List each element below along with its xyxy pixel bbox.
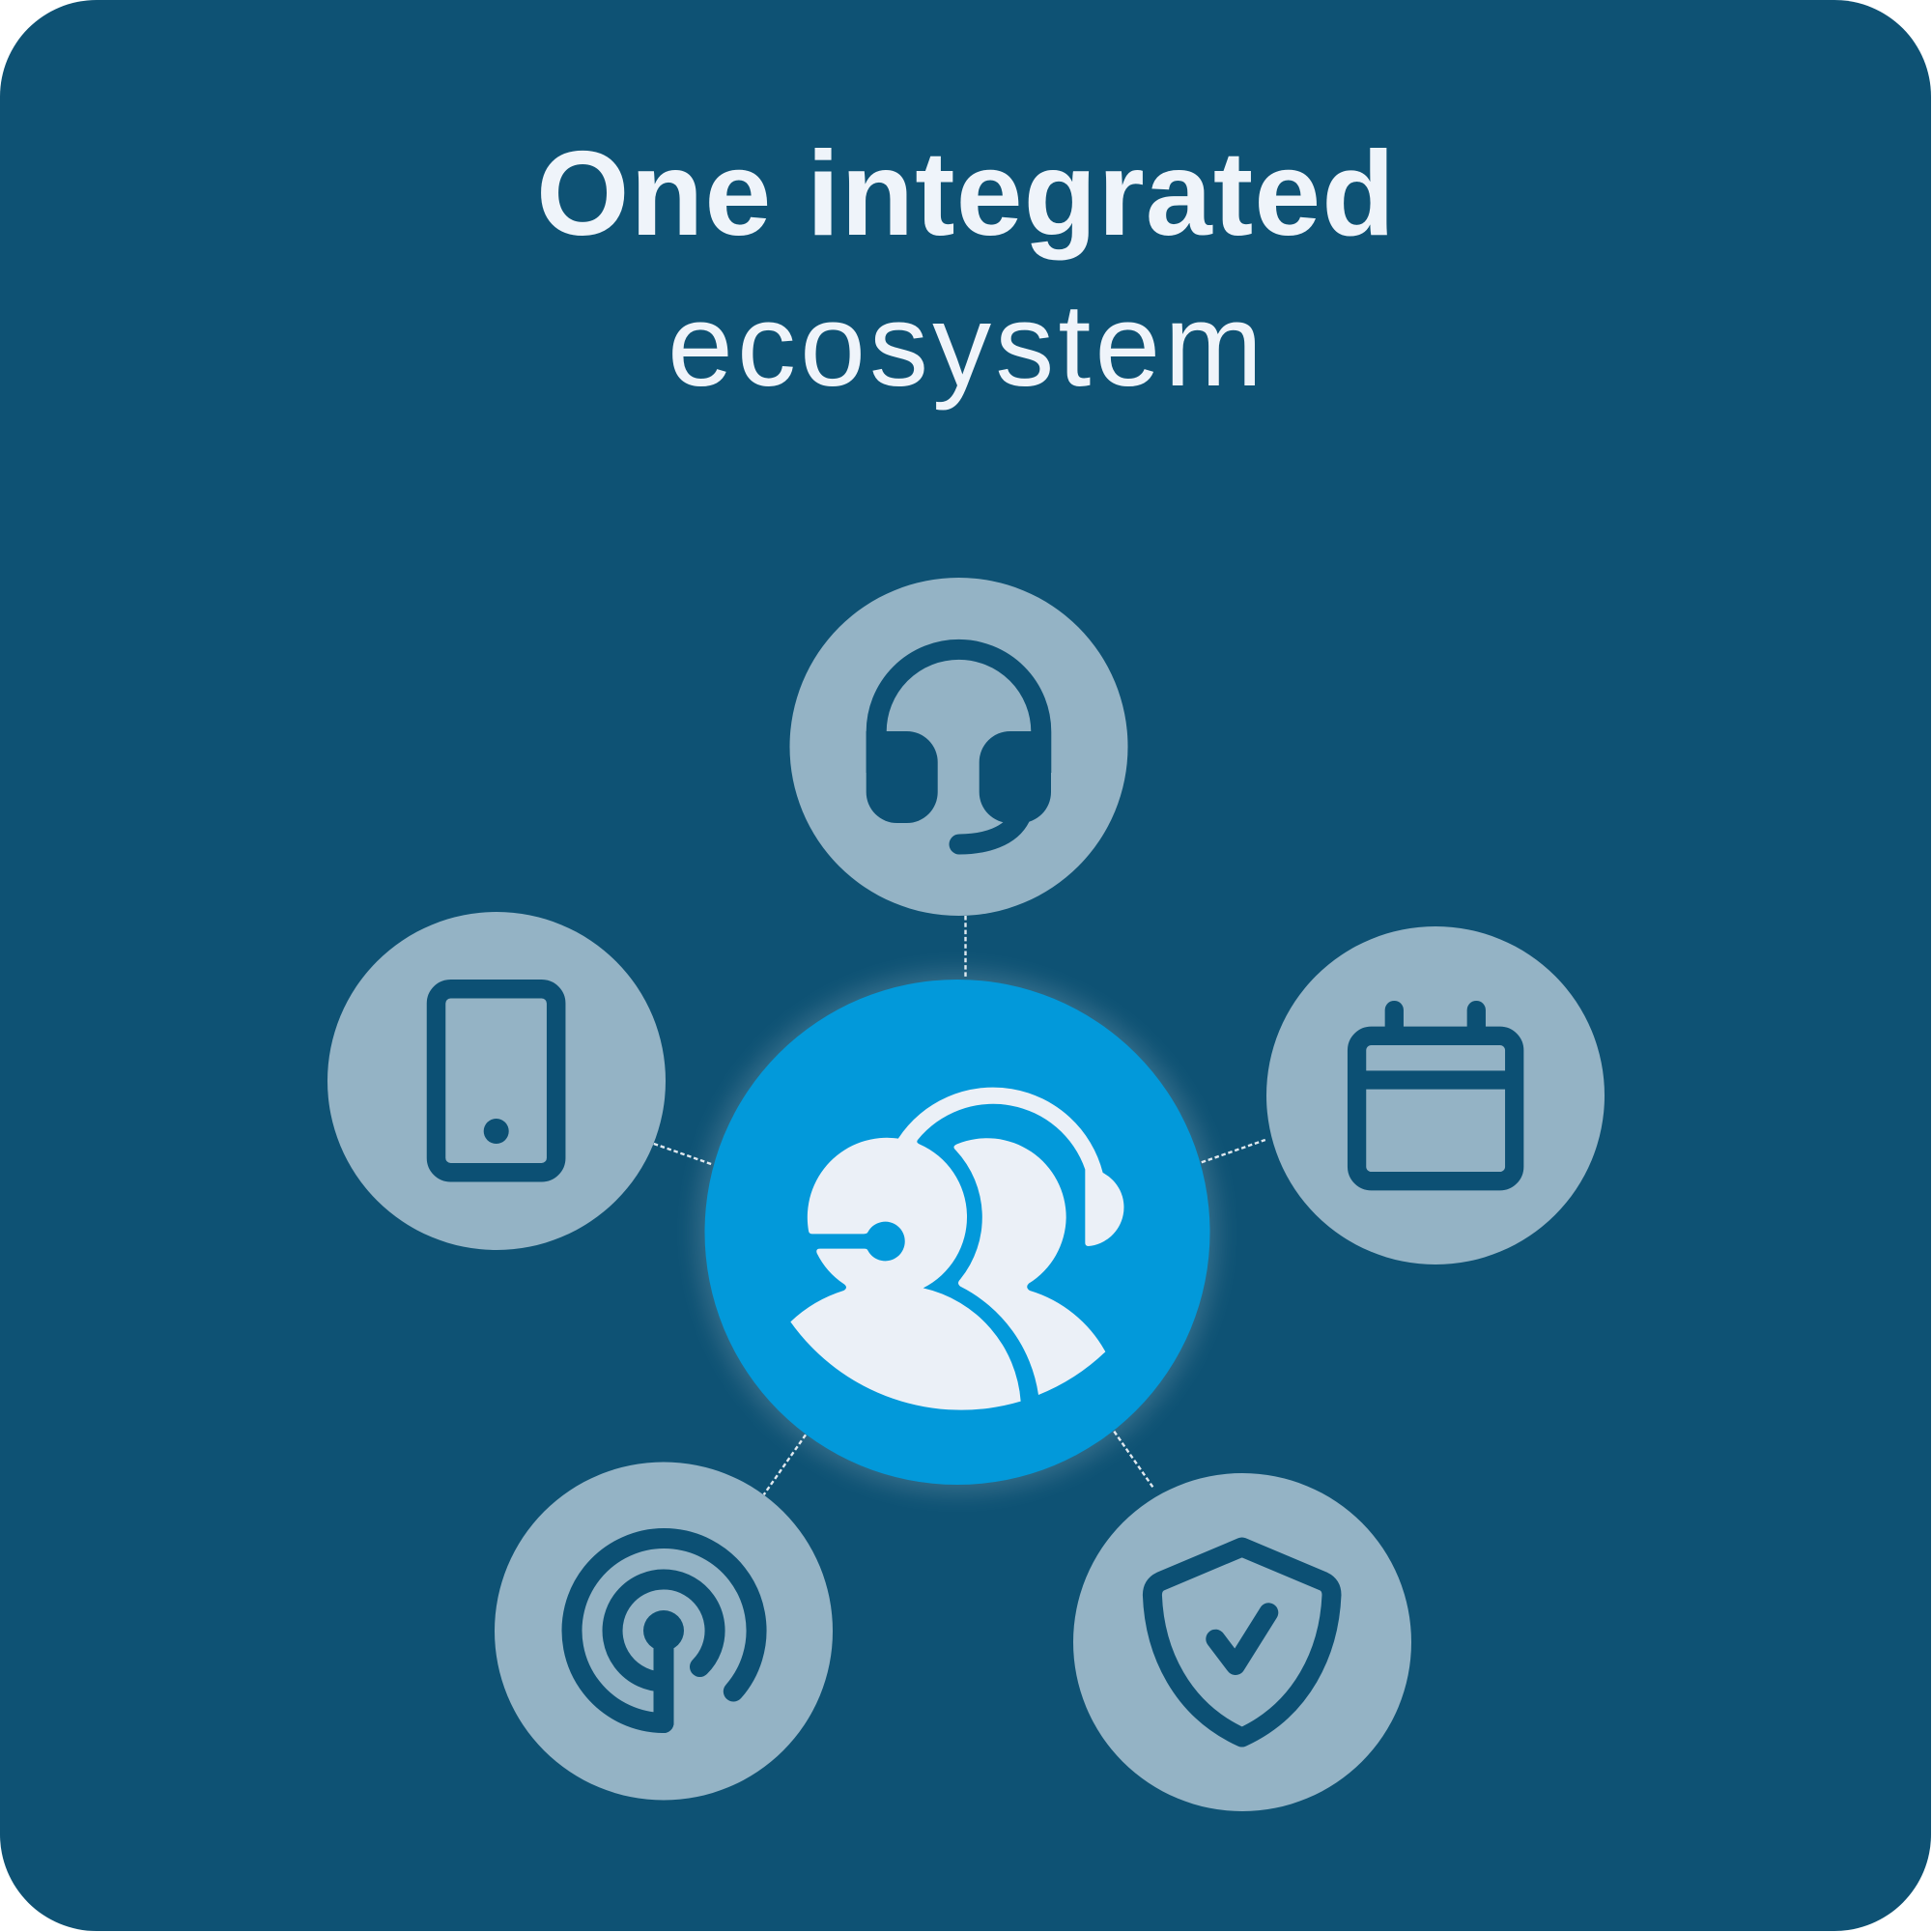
icon: shield (1152, 1548, 1331, 1737)
node circle: headset (790, 578, 1128, 916)
icon: signal (572, 1539, 756, 1723)
node: security shield (1073, 1473, 1411, 1811)
node: mobile phone (327, 912, 666, 1250)
node: calendar (1266, 926, 1605, 1264)
front agent with headset (790, 1088, 1123, 1410)
icon: headset (867, 649, 1051, 844)
icon: agents with headset (790, 1088, 1123, 1410)
title (536, 128, 1395, 411)
connector: bottom right (1114, 1432, 1154, 1490)
icon: calendar (1357, 1010, 1515, 1181)
connector: right (1202, 1140, 1265, 1162)
title line: ecosystem: ecosystem (668, 279, 1263, 411)
hub glow (696, 972, 1218, 1493)
title line: One integrated: One integrated (536, 128, 1395, 261)
node circle: calendar (1266, 926, 1605, 1264)
connector: left (654, 1144, 712, 1164)
hub circle (705, 980, 1209, 1485)
connector: top (964, 916, 967, 978)
node: headset support (790, 578, 1128, 916)
node: signal broadcast (495, 1463, 833, 1801)
node circle: phone (327, 912, 666, 1250)
central hub (696, 972, 1218, 1493)
node circle: shield (1073, 1473, 1411, 1811)
back agent (953, 1138, 1105, 1395)
connector: bottom left (764, 1435, 806, 1494)
connector lines (654, 916, 1265, 1494)
icon: phone (437, 989, 556, 1173)
node circle: signal (495, 1463, 833, 1801)
